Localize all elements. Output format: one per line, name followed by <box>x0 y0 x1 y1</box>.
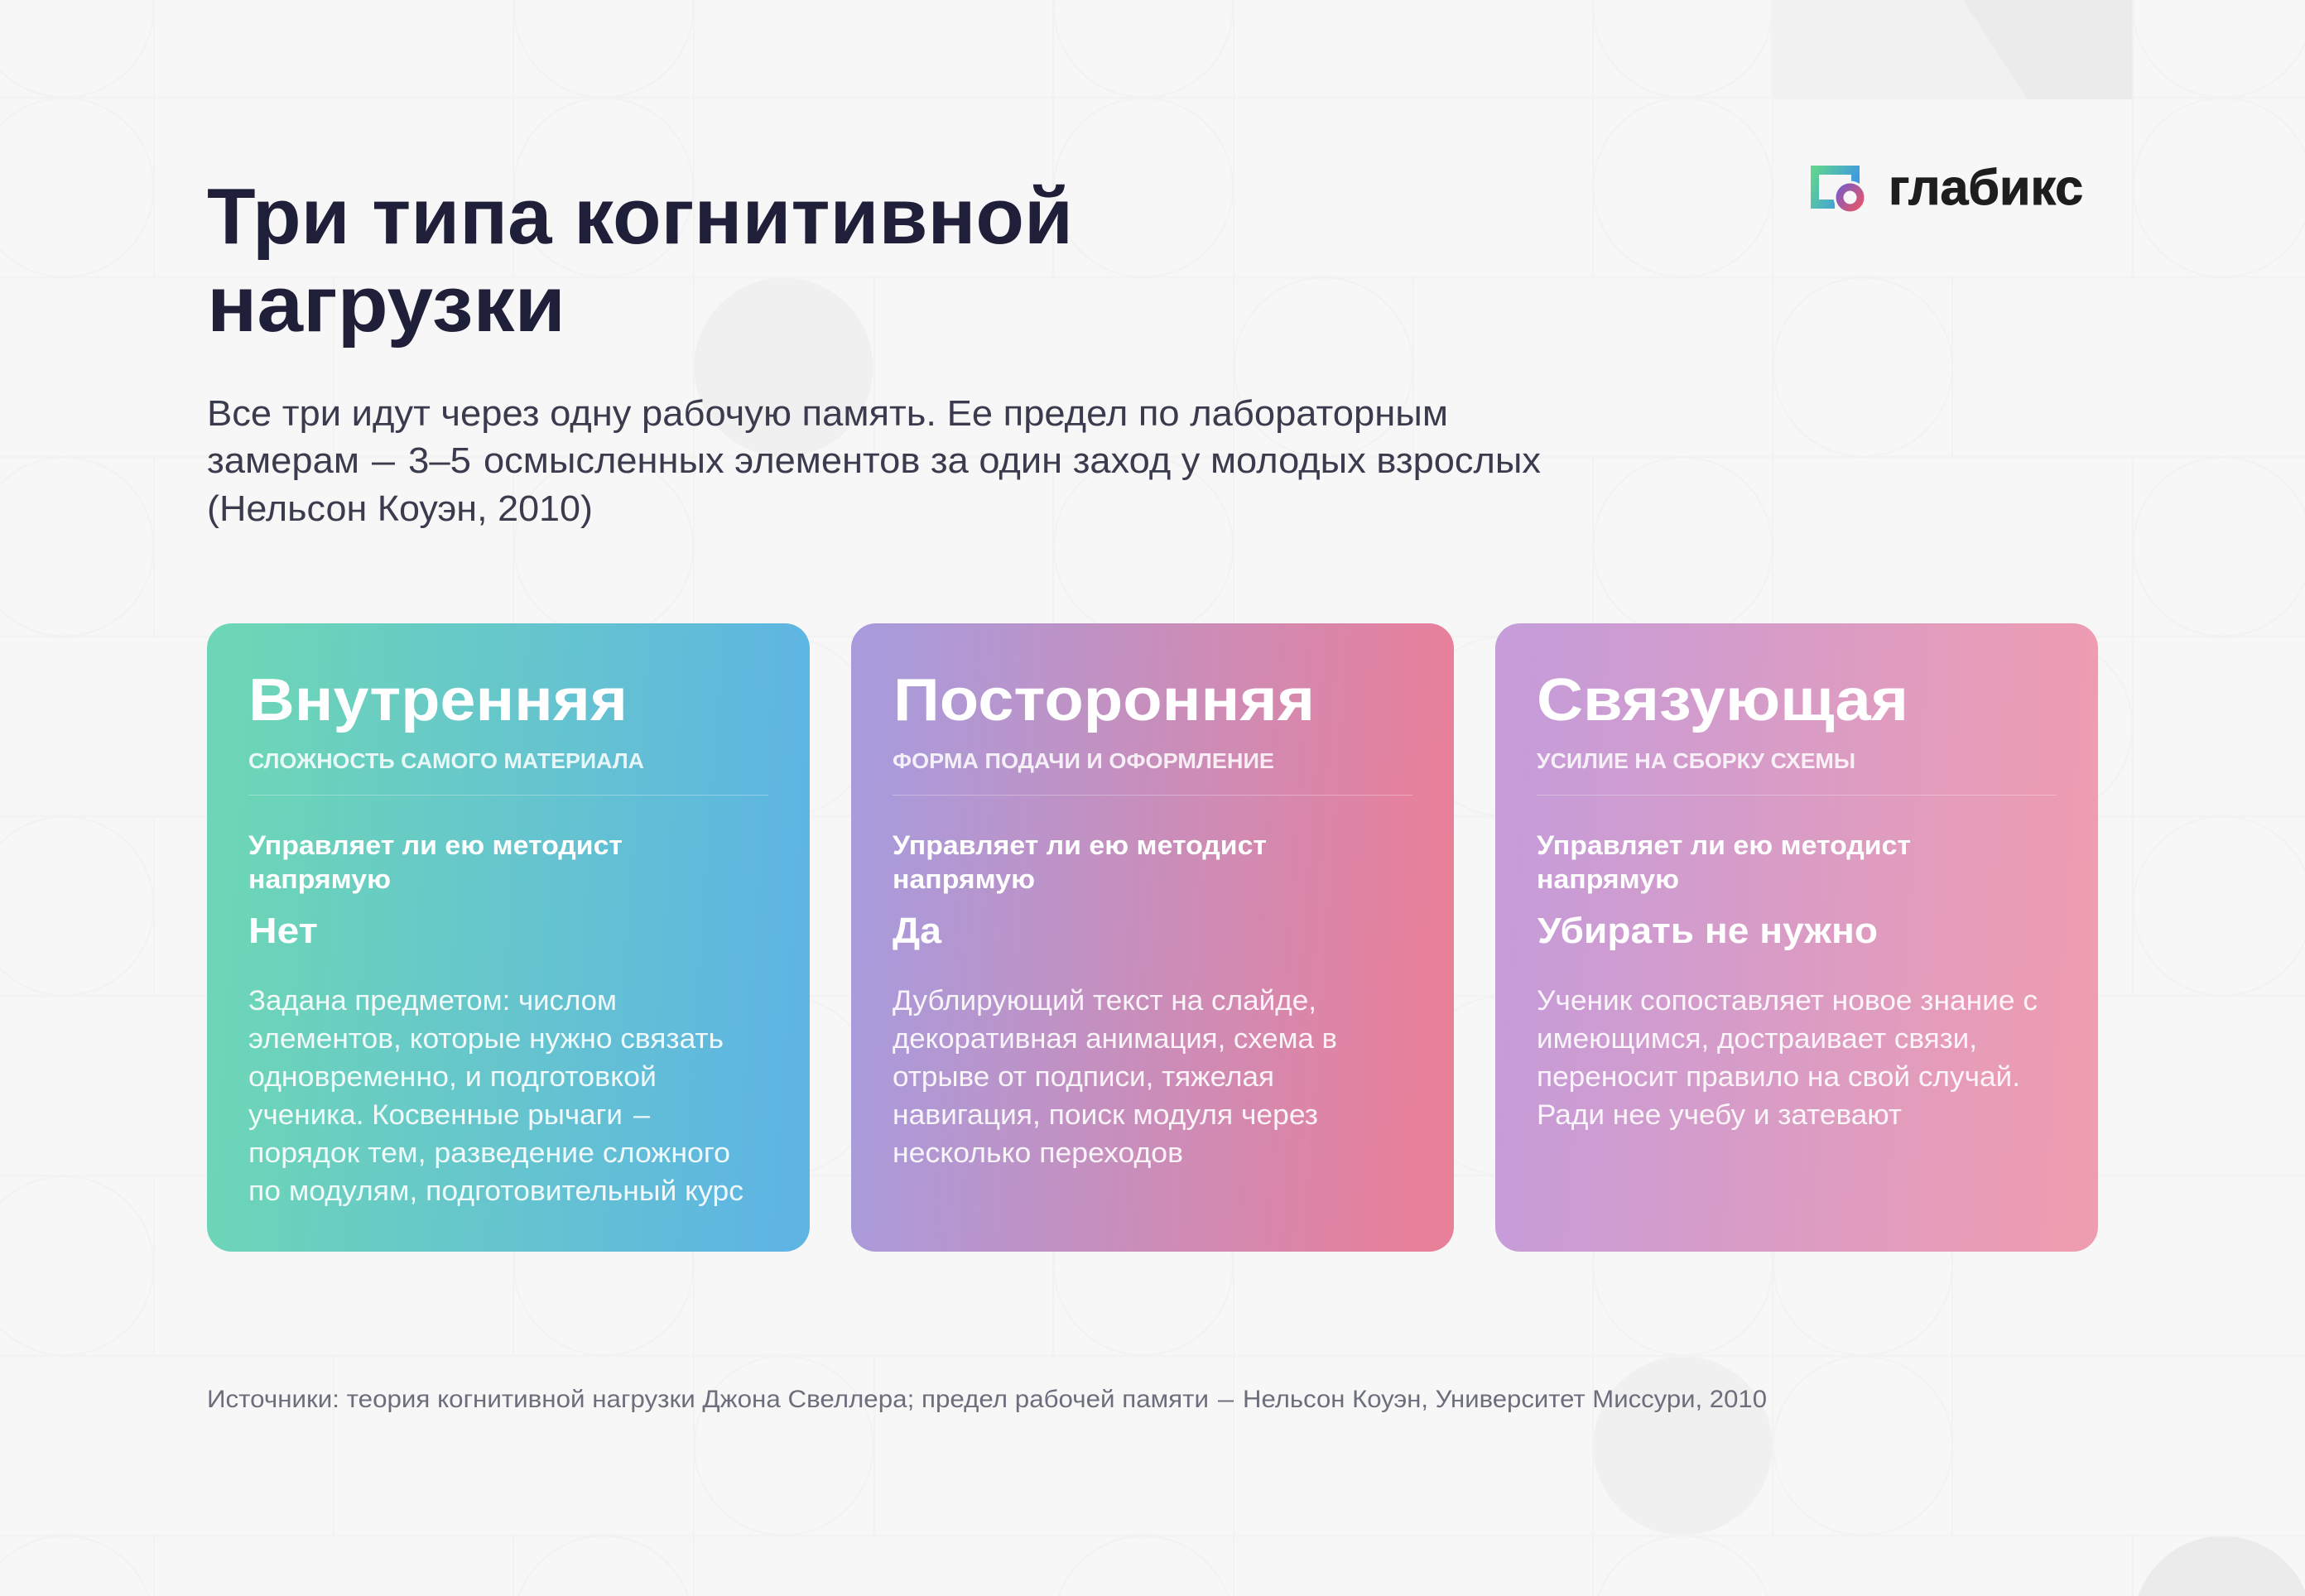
body text <box>893 985 1337 1169</box>
answer: Убирать не нужно <box>1537 911 1878 951</box>
subtitle text block: Все три идут через одну рабочую память. Ее предел по лабораторным <box>207 393 1448 434</box>
body text: Дублирующий текст на слайде, <box>893 985 1316 1017</box>
body text: ученика. Косвенные рычаги <box>248 1099 623 1131</box>
subtitle text block: — <box>372 440 395 481</box>
question: напрямую <box>893 864 1035 894</box>
question: Управляет ли ею методист <box>248 830 623 860</box>
body text: Ради нее учебу и затевают <box>1537 1099 1902 1131</box>
logo wordmark: глабикс <box>1889 160 2083 215</box>
footer sources <box>207 1386 1767 1413</box>
card heading: Внутренняя <box>248 667 628 733</box>
title: нагрузки <box>207 260 565 349</box>
panel: intrinsic load <box>207 623 810 1252</box>
answer: Да <box>893 911 942 951</box>
body text <box>248 985 743 1207</box>
body text: отрыве от подписи, тяжелая <box>893 1061 1274 1093</box>
body text: имеющимся, достраивает связи, <box>1537 1023 1977 1055</box>
question: напрямую <box>1537 864 1679 894</box>
body text: навигация, поиск модуля через <box>893 1099 1318 1131</box>
logo: glabix <box>1811 160 2083 215</box>
question <box>1537 830 1911 894</box>
card subheading: СЛОЖНОСТЬ САМОГО МАТЕРИАЛА <box>248 748 644 773</box>
footer sources: Нельсон Коуэн, Университет Миссури, 2010 <box>1243 1386 1767 1413</box>
body text: — <box>633 1099 650 1131</box>
question: Управляет ли ею методист <box>1537 830 1911 860</box>
icon: logo mark <box>1811 166 1866 214</box>
subtitle text block: замерам <box>207 440 359 481</box>
footer sources: — <box>1218 1386 1234 1413</box>
body text: несколько переходов <box>893 1137 1183 1169</box>
body text: декоративная анимация, схема в <box>893 1023 1337 1055</box>
title: Три типа когнитивной <box>207 172 1073 261</box>
subtitle text block: осмысленных элементов за один заход у молодых взрослых <box>484 440 1541 481</box>
body text: одновременно, и подготовкой <box>248 1061 657 1093</box>
card subheading: ФОРМА ПОДАЧИ И ОФОРМЛЕНИЕ <box>893 748 1274 773</box>
subtitle text block <box>207 393 1541 529</box>
body text <box>1537 985 2038 1131</box>
subtitle text block: 3–5 <box>408 440 471 481</box>
footer sources: Источники: теория когнитивной нагрузки Джона Свеллера; предел рабочей памяти <box>207 1386 1209 1413</box>
answer: Нет <box>248 911 318 951</box>
body text: Ученик сопоставляет новое знание с <box>1537 985 2038 1017</box>
question: Управляет ли ею методист <box>893 830 1267 860</box>
question <box>248 830 623 894</box>
panel: extraneous load <box>851 623 1454 1252</box>
body text: переносит правило на свой случай. <box>1537 1061 2020 1093</box>
body text: порядок тем, разведение сложного <box>248 1137 730 1169</box>
body text: по модулям, подготовительный курс <box>248 1175 743 1207</box>
body text: элементов, которые нужно связать <box>248 1023 724 1055</box>
subtitle text block: (Нельсон Коуэн, 2010) <box>207 488 593 529</box>
panel: germane load <box>1495 623 2098 1252</box>
title <box>207 172 1073 349</box>
card heading: Посторонняя <box>893 667 1315 733</box>
question <box>893 830 1267 894</box>
question: напрямую <box>248 864 391 894</box>
card subheading: УСИЛИЕ НА СБОРКУ СХЕМЫ <box>1537 748 1855 773</box>
card heading: Связующая <box>1537 667 1908 733</box>
body text: Задана предметом: числом <box>248 985 617 1017</box>
